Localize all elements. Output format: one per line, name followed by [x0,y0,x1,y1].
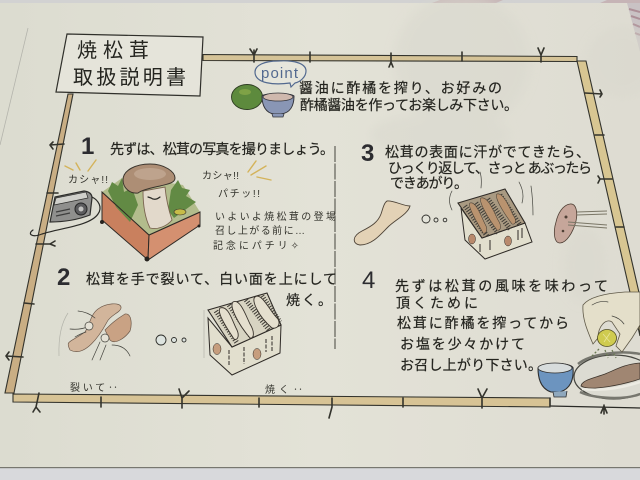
step 4 text [395,278,608,373]
icon: camera with strap [30,191,100,236]
step 1 [30,133,336,262]
photo note: 召し上がる前に… [215,224,305,237]
point callout [255,61,306,87]
grilled mushroom strip [354,201,410,245]
step 2: 焼く。 [286,292,332,308]
title line 1: 焼松茸 [77,39,149,62]
dashed divider [334,146,336,349]
grilling label: 焼く‥ [265,384,303,396]
bamboo frame [5,48,640,418]
step 3 text: ひっくり返して、さっと あぶったら [388,160,592,176]
grill with mushrooms [204,293,281,375]
step 3 text: 松茸の表面に汗がでてきたら、 [385,144,590,160]
mushroom held by chopsticks [554,204,607,243]
photo note [213,210,336,252]
step 4 [362,267,640,399]
thought dots [156,335,186,345]
point text: 醤油に酢橘を搾り、お好みの [299,80,502,96]
shutter sound left: カシャ!! [68,174,108,186]
point callout: point [261,65,299,82]
step 3 number: 3 [361,140,374,167]
step 1 number: 1 [81,133,94,160]
step 4 text: 松茸に酢橘を搾ってから [397,315,569,331]
snap sound: パチッ!! [218,188,260,200]
thought dots [422,215,447,223]
title line 2: 取扱説明書 [73,66,186,89]
tearing label: 裂いて‥ [70,382,118,394]
salt bowl [538,363,573,397]
step 2 [57,264,337,396]
frame knots [6,48,624,418]
hand squeezing sudachi [583,292,640,358]
step 3 [354,140,607,259]
step 3 text: できあがり。 [390,175,468,191]
step 2 heading: 松茸を手で裂いて、白い面を上にして [86,271,337,287]
point text [299,80,518,113]
camera flash marks right [248,161,271,180]
step 1 heading: 先ずは、松茸の写真を撮りましょう。 [110,141,334,157]
photo note: いよいよ焼松茸の登場 [215,210,336,223]
faint background watermark circles [370,0,640,303]
steam lines [450,172,533,215]
step 4 text: お塩を少々かけて [400,336,525,352]
icon: soy sauce bowl [262,93,294,117]
point text: 酢橘醤油を作ってお楽しみ下さい。 [300,97,518,113]
hands tearing mushroom [59,304,131,360]
step 3 text [385,144,592,191]
mushroom in wooden box [100,164,200,262]
grill turning mushrooms [458,189,532,259]
plate with grilled mushroom [574,352,640,399]
icon: sudachi lime [232,84,262,110]
step 4 text: お召し上がり下さい。 [400,357,542,373]
step 2 number: 2 [57,264,70,291]
step 4 text: 頂くために [396,295,478,311]
step 4 number: 4 [362,267,375,294]
shutter sound right: カシャ!! [202,170,239,182]
photo note: 記念にパチリ✧ [213,240,299,252]
step 4 text: 先ずは松茸の風味を味わって [395,278,608,294]
title signboard [56,34,203,96]
camera flash marks left [65,160,96,171]
